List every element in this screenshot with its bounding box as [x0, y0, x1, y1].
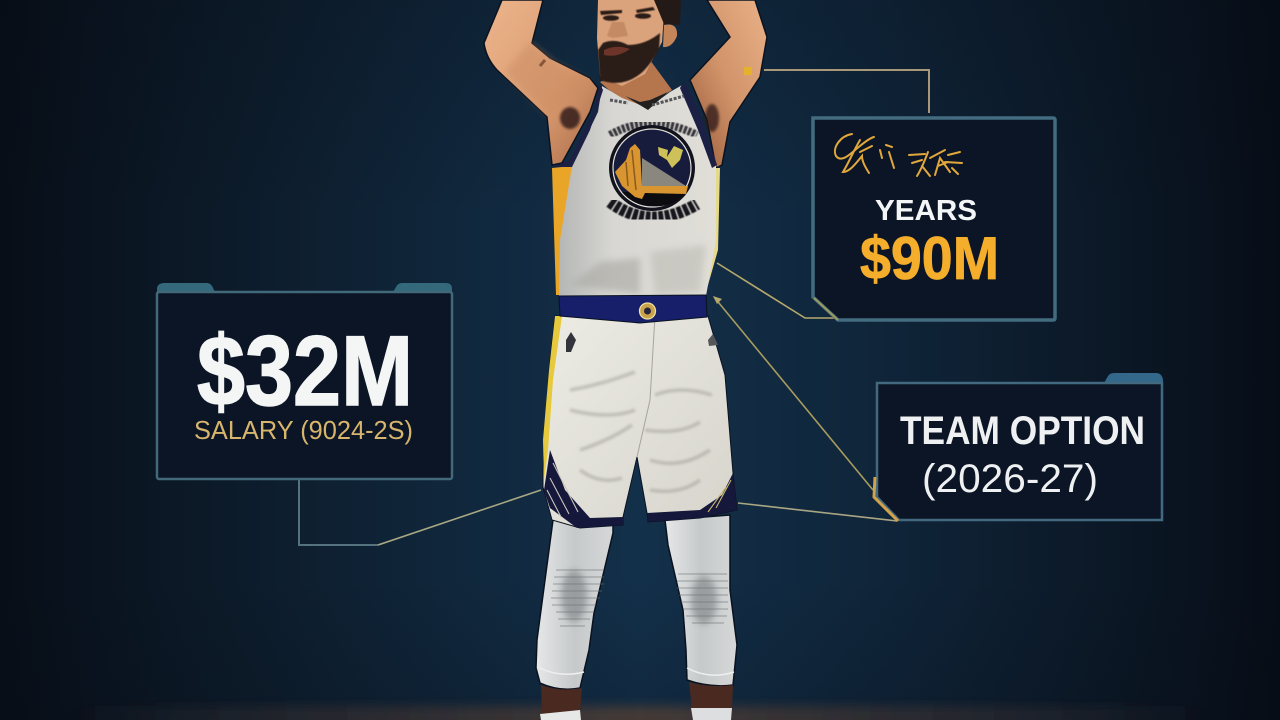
gold signature scribble	[835, 134, 962, 176]
jersey	[553, 81, 717, 296]
connector: shorts to team option panel	[738, 503, 897, 521]
collar marks	[610, 96, 684, 105]
jersey folds	[570, 258, 640, 294]
shorts	[543, 316, 737, 528]
option season: (2026-27)	[922, 457, 1098, 501]
upper jersey lettering band	[610, 124, 697, 135]
contract value: $90M	[860, 225, 999, 292]
jersey side panels	[552, 166, 720, 295]
panel: salary	[157, 283, 452, 479]
marker on arm	[744, 67, 752, 75]
belt	[559, 295, 707, 323]
panel: contract length	[813, 118, 1055, 320]
panel: team option	[874, 373, 1163, 521]
left hem trim	[544, 450, 623, 528]
gold corner accent	[874, 477, 898, 521]
chamfer accent	[814, 298, 838, 320]
right leg sleeve	[665, 515, 737, 686]
connector: jersey to contract panel	[717, 263, 838, 318]
player figure	[484, 0, 767, 720]
right arm	[690, 0, 767, 168]
lower legs and socks	[540, 682, 733, 720]
left arm	[484, 0, 598, 165]
arm shading	[505, 42, 719, 132]
lower jersey lettering band	[610, 202, 697, 218]
head	[597, 0, 681, 86]
team logo	[609, 125, 695, 211]
nose	[607, 22, 628, 38]
team option label: TEAM OPTION	[900, 409, 1145, 453]
jersey straps	[553, 84, 603, 167]
waistband logos	[566, 332, 576, 352]
salary figure: $32M	[197, 315, 413, 426]
brows and eyes	[600, 7, 655, 21]
left leg sleeve	[536, 515, 613, 689]
right hem trim	[647, 473, 737, 522]
neckline	[602, 87, 668, 110]
ear	[663, 24, 677, 47]
centre seam	[637, 316, 655, 457]
connector: salary panel to shorts	[299, 480, 541, 545]
beard	[598, 33, 660, 83]
belt buckle	[640, 303, 656, 319]
connector: arm to contract panel	[764, 70, 929, 113]
salary caption: SALARY (9024-2S)	[194, 415, 413, 445]
mouth	[604, 47, 630, 56]
shorts folds	[570, 372, 712, 491]
connector: waist to team option panel	[713, 296, 873, 490]
neck	[600, 60, 672, 108]
hair	[654, 0, 681, 25]
years label: YEARS	[875, 195, 977, 227]
yellow side stripe	[543, 316, 562, 480]
